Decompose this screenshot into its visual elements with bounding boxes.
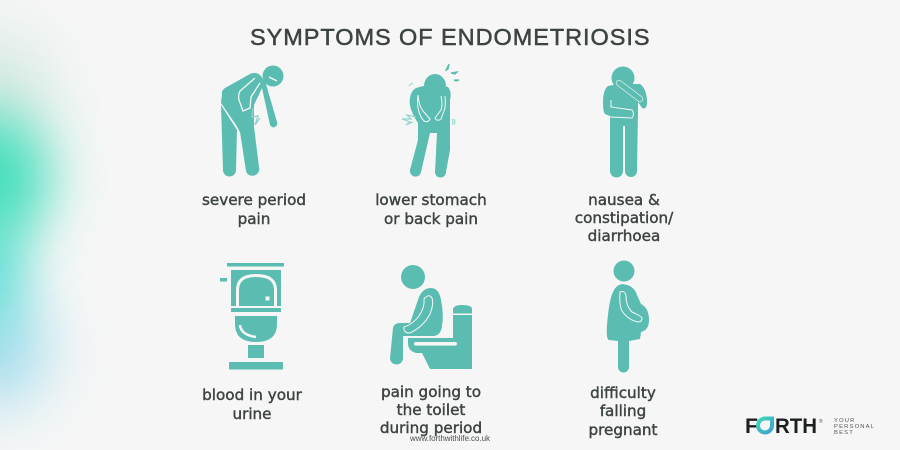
label: nausea and constipation or diarrhoea: nausea & bbox=[588, 191, 660, 209]
icon: bent person with period pain bbox=[221, 66, 284, 176]
label: blood in your urine: urine bbox=[232, 405, 272, 423]
label: difficulty falling pregnant: falling bbox=[600, 402, 646, 420]
logo: FORTH: YOUR bbox=[834, 418, 856, 424]
logo: FORTH: PERSONAL bbox=[834, 424, 875, 430]
label: nausea and constipation or diarrhoea: constipation/ bbox=[575, 209, 674, 227]
logo: FORTH: ® bbox=[819, 418, 823, 425]
title: SYMPTOMS OF ENDOMETRIOSIS bbox=[250, 24, 650, 50]
logo: FORTH bbox=[745, 414, 875, 438]
label: severe period pain: severe period bbox=[202, 191, 306, 209]
label: pain going to the toilet during period: pain going to bbox=[381, 383, 481, 401]
icon: toilet bbox=[220, 263, 284, 370]
gradient glow bbox=[0, 30, 50, 405]
label: severe period pain: pain bbox=[238, 210, 270, 228]
label: pain going to the toilet during period: during period bbox=[380, 419, 482, 437]
logo: FORTH: RTH bbox=[775, 414, 817, 438]
label: lower stomach or back pain: lower stomach bbox=[375, 191, 487, 209]
label: difficulty falling pregnant: difficulty bbox=[590, 384, 656, 402]
icon: person in pain on toilet bbox=[390, 265, 472, 369]
logo: FORTH: F bbox=[745, 414, 758, 438]
icon: pregnant person bbox=[607, 260, 649, 372]
icon: person with nausea bbox=[603, 66, 647, 178]
logo: FORTH: BEST bbox=[834, 430, 854, 436]
label: blood in your urine: blood in your bbox=[202, 386, 303, 404]
website url: www.forthwithlife.co.uk bbox=[409, 434, 491, 443]
icon: person with lower stomach pain bbox=[402, 64, 459, 178]
label: nausea and constipation or diarrhoea: diarrhoea bbox=[588, 227, 660, 245]
label: pain going to the toilet during period: the toilet bbox=[397, 401, 465, 419]
label: lower stomach or back pain: or back pain bbox=[384, 210, 478, 228]
label: difficulty falling pregnant: pregnant bbox=[588, 421, 658, 439]
